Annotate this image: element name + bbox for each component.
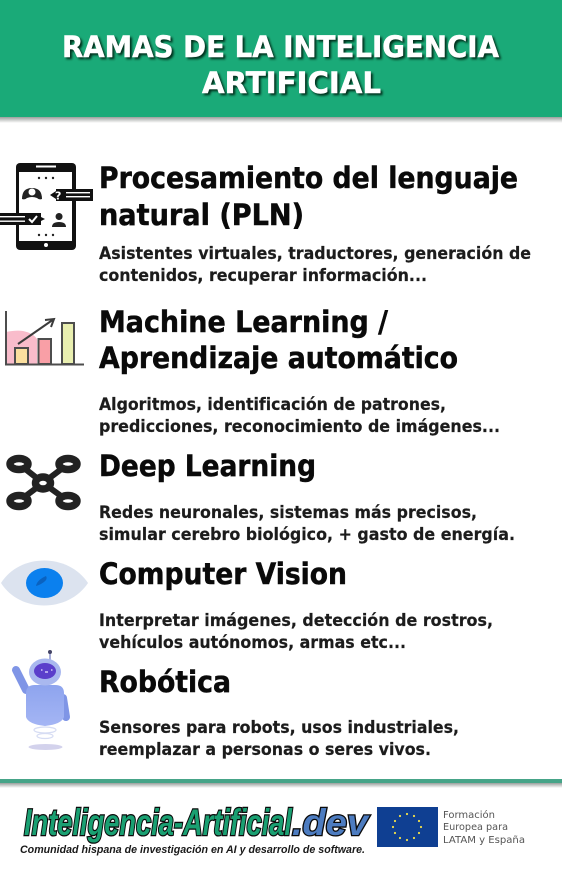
heading: PLN: natural (PLN) <box>99 198 304 232</box>
text: Machine Learning description <box>99 395 500 437</box>
text: Deep Learning description: simular cerebro biológico, + gasto de energía. <box>99 525 515 545</box>
icon detail: lower dots <box>38 234 54 236</box>
title: ARTIFICIAL <box>202 66 381 100</box>
icon: neural network nodes <box>10 458 77 506</box>
text: Formación Europea: LATAM y España <box>443 835 525 846</box>
text: Formación Europea: Formación <box>443 809 495 821</box>
text: Computer Vision description <box>99 611 493 653</box>
text: Computer Vision description: Interpretar imágenes, detección de rostros, <box>99 611 493 631</box>
title: RAMAS DE LA INTELIGENCIA <box>62 30 500 64</box>
heading: Machine Learning: Aprendizaje automático <box>99 341 458 375</box>
icon: EU flag <box>377 807 438 847</box>
icon detail: upper dots <box>38 177 54 179</box>
heading: Robótica: Robótica <box>99 665 231 699</box>
heading: Machine Learning <box>99 305 458 375</box>
heading: Machine Learning: Machine Learning / <box>99 305 388 339</box>
icon detail: question bubble: ? <box>55 190 61 202</box>
header band <box>0 0 562 123</box>
logo: Inteligencia-Artificial.dev: Inteligencia-Artificial <box>24 802 293 843</box>
text: PLN description <box>99 244 531 286</box>
heading: Deep Learning: Deep Learning <box>99 449 316 483</box>
text: Robótica description: Sensores para robots, usos industriales, <box>99 718 459 738</box>
icon detail: upper person <box>22 188 42 199</box>
icon detail: lower person <box>52 213 66 227</box>
text: Machine Learning description: predicciones, reconocimiento de imágenes... <box>99 417 500 437</box>
icon: bar chart with rising arrow <box>6 311 84 364</box>
text: Deep Learning description: Redes neuronales, sistemas más precisos, <box>99 503 477 523</box>
icon: robot <box>16 650 66 750</box>
icon detail: check bubble <box>0 213 45 225</box>
icon: eye <box>1 560 88 606</box>
title <box>62 30 502 102</box>
text: Robótica description: reemplazar a personas o seres vivos. <box>99 740 431 760</box>
heading: Computer Vision: Computer Vision <box>99 557 347 591</box>
text: Formación Europea: Europea para <box>443 822 508 833</box>
heading: PLN: Procesamiento del lenguaje <box>99 161 518 195</box>
title: RAMAS DE LA INTELIGENCIA <box>64 32 502 66</box>
title: ARTIFICIAL <box>204 68 383 102</box>
text: Robótica description <box>99 718 459 760</box>
text: Machine Learning description: Algoritmos, identificación de patrones, <box>99 395 446 415</box>
logo tagline: Comunidad hispana de investigación en AI y desarrollo de software. <box>20 844 365 856</box>
text: Deep Learning description <box>99 503 515 545</box>
icon: smartphone with chat bubbles <box>0 163 93 250</box>
heading: PLN <box>99 161 518 232</box>
text: Computer Vision description: vehículos autónomos, armas etc... <box>99 633 406 653</box>
logo: Inteligencia-Artificial.dev: .dev <box>292 802 370 843</box>
footer divider <box>0 779 562 788</box>
text: PLN description: contenidos, recuperar información... <box>99 266 427 286</box>
text: Formación Europea <box>443 809 525 846</box>
text: PLN description: Asistentes virtuales, traductores, generación de <box>99 244 531 264</box>
